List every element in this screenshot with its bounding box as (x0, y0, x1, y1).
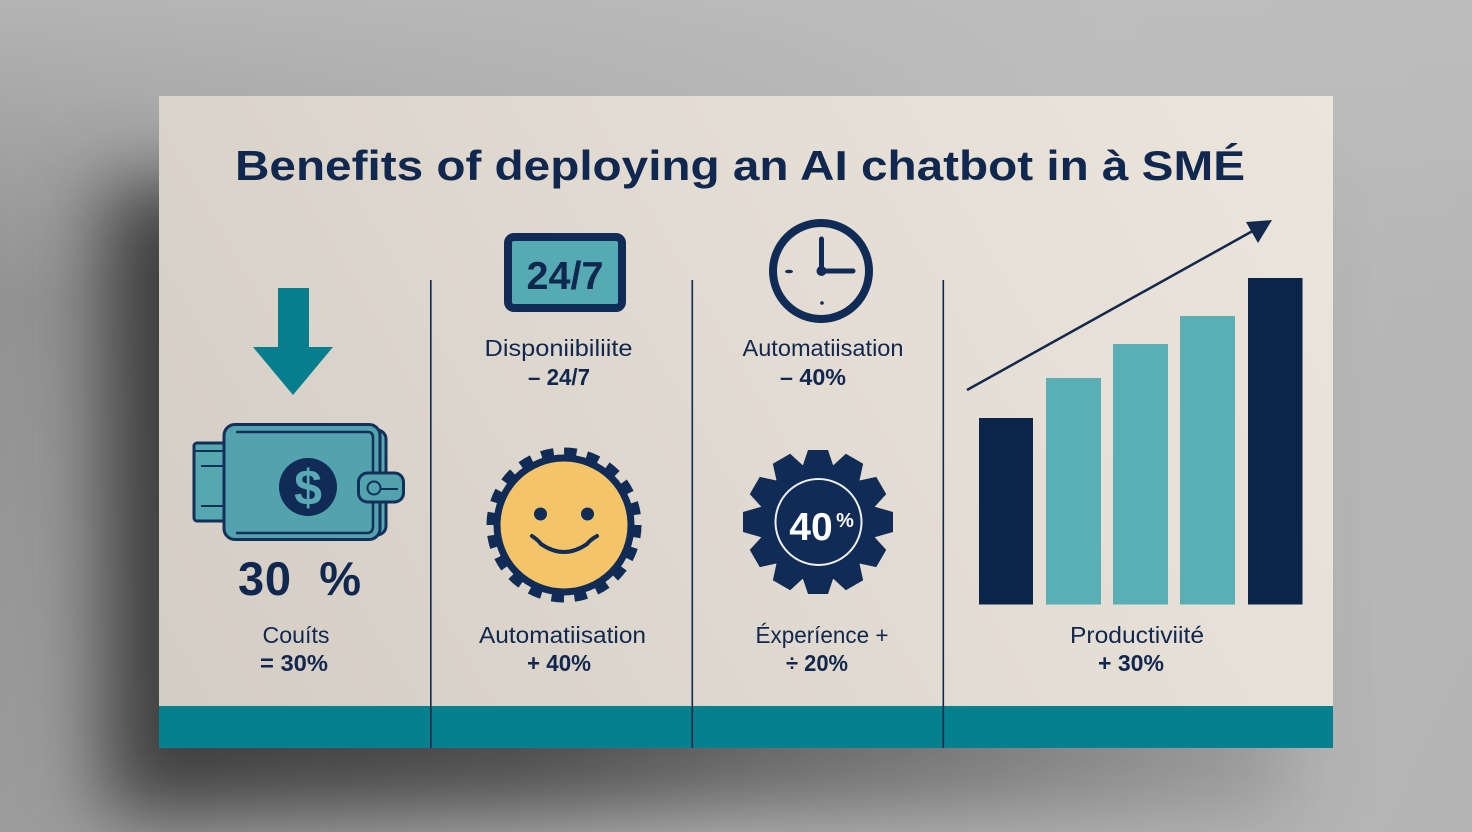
icon: down arrow (253, 288, 333, 395)
value: availability: – 24/7 (528, 364, 590, 390)
value: experience: ÷ 20% (786, 650, 848, 676)
icon: dollar sign: $ (294, 460, 322, 516)
panel: automation top (742, 223, 904, 390)
icon: 40% gear: % (836, 510, 854, 532)
panel: costs (194, 288, 404, 676)
panel: availability (484, 237, 632, 390)
label: experience: Éxperíence + (756, 622, 888, 648)
label: automation: Automatiisation (742, 335, 904, 361)
label: productivity: Productiviité (1070, 622, 1204, 648)
title: Benefits of deploying an AI chatbot in à SMÉ (235, 142, 1245, 189)
icon: clock (773, 223, 869, 319)
icon: 24/7 display (508, 237, 622, 308)
arrow: growth trend (967, 220, 1272, 390)
value: productivity: + 30% (1098, 650, 1164, 676)
value: automation: + 40% (527, 650, 591, 676)
panel: infographic card (159, 96, 1333, 748)
icon: 24/7 display: 24/7 (526, 255, 604, 298)
icon: smiley gear (491, 452, 637, 598)
value: automation: – 40% (780, 364, 846, 390)
value: costs: = 30% (260, 650, 328, 676)
big figure: 30 % (238, 552, 361, 605)
label: availability: Disponiibiliite (484, 335, 632, 361)
panel: productivity (967, 220, 1302, 676)
icon: 40% gear: 40 (789, 506, 833, 549)
label: automation: Automatiisation (479, 622, 646, 648)
label: costs: Couíts (262, 622, 330, 648)
icon: wallet (194, 424, 404, 540)
bar chart (979, 278, 1302, 604)
panel: automation bottom (479, 452, 646, 676)
footer band (159, 706, 1333, 748)
panel: experience (743, 450, 893, 676)
icon: 40% gear (743, 450, 893, 594)
